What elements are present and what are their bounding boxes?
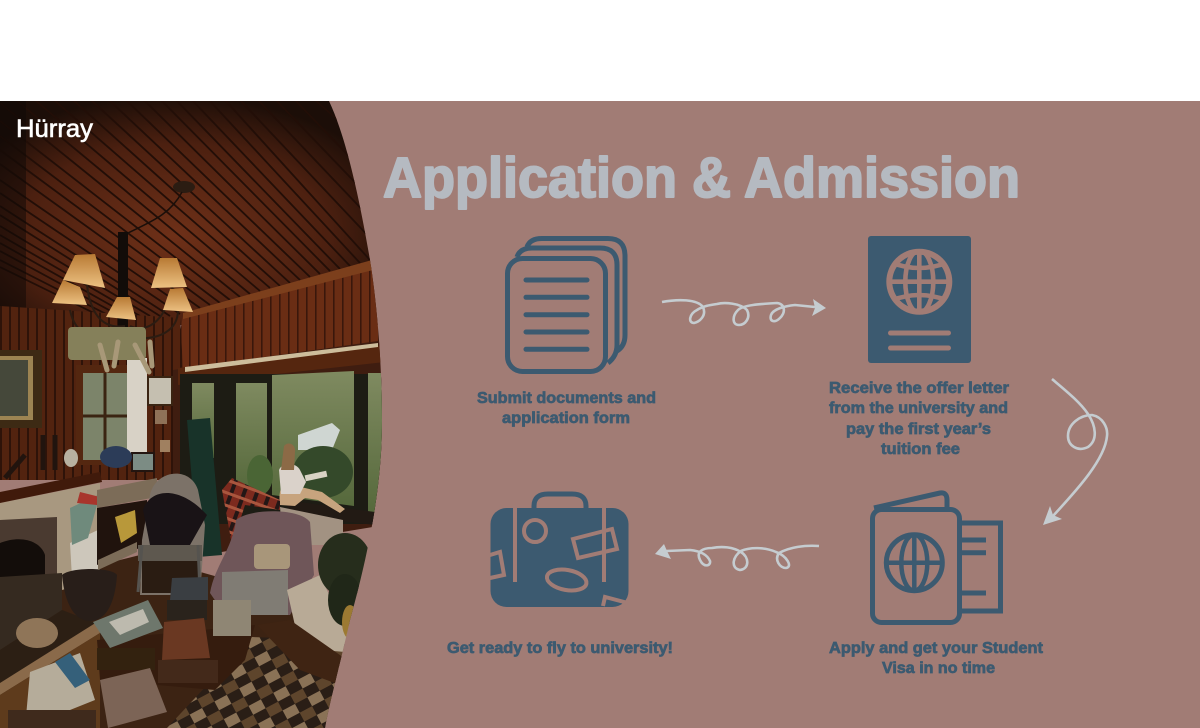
step 2 caption: pay the first year’s [846,421,991,438]
plant and white cloth [269,533,368,683]
white top band [0,0,1200,101]
step 1 caption: Submit documents and [477,390,656,407]
arrow: step 2 to step 3 [1043,379,1107,525]
step 2 caption [829,380,1009,458]
chandelier [52,181,195,372]
step 3 caption: Apply and get your Student [829,640,1044,657]
title: Application & Admission [383,146,1020,210]
shelf with yellow books [97,478,157,570]
dark chair [138,474,207,595]
armchair with cushion [210,511,314,615]
floor [0,555,360,728]
photo: cosy wooden living room [0,100,385,728]
step 1 caption [477,390,656,427]
windows with garden view [178,343,385,545]
step 3 caption: Visa in no time [882,660,995,677]
logo: Hürray [16,115,94,143]
arrow: step 3 to step 4 [655,544,819,570]
icon: passport with offer letter [868,236,971,363]
step 2 caption: tuition fee [881,441,960,458]
step 4 caption: Get ready to fly to university! [447,640,673,657]
icon: stacked documents [508,238,625,372]
walls [0,260,385,560]
stacks of books and magazines [8,577,255,728]
woman reading on window sill [279,444,345,513]
ceiling [0,100,385,325]
step 3 caption [829,640,1044,677]
patterned rug [167,637,345,728]
mantle and fireplace [0,435,102,728]
arrow: step 1 to step 2 [662,299,826,325]
pictures and left window [0,350,172,471]
icon: open passport with visa [872,493,1000,622]
plaid throw [222,478,280,545]
step 1 caption: application form [502,410,630,427]
step 2 caption: Receive the offer letter [829,380,1009,397]
curtain [187,418,222,557]
bucket and stocking [62,492,117,621]
step 2 caption: from the university and [829,400,1008,417]
icon: suitcase with stickers [490,494,628,607]
